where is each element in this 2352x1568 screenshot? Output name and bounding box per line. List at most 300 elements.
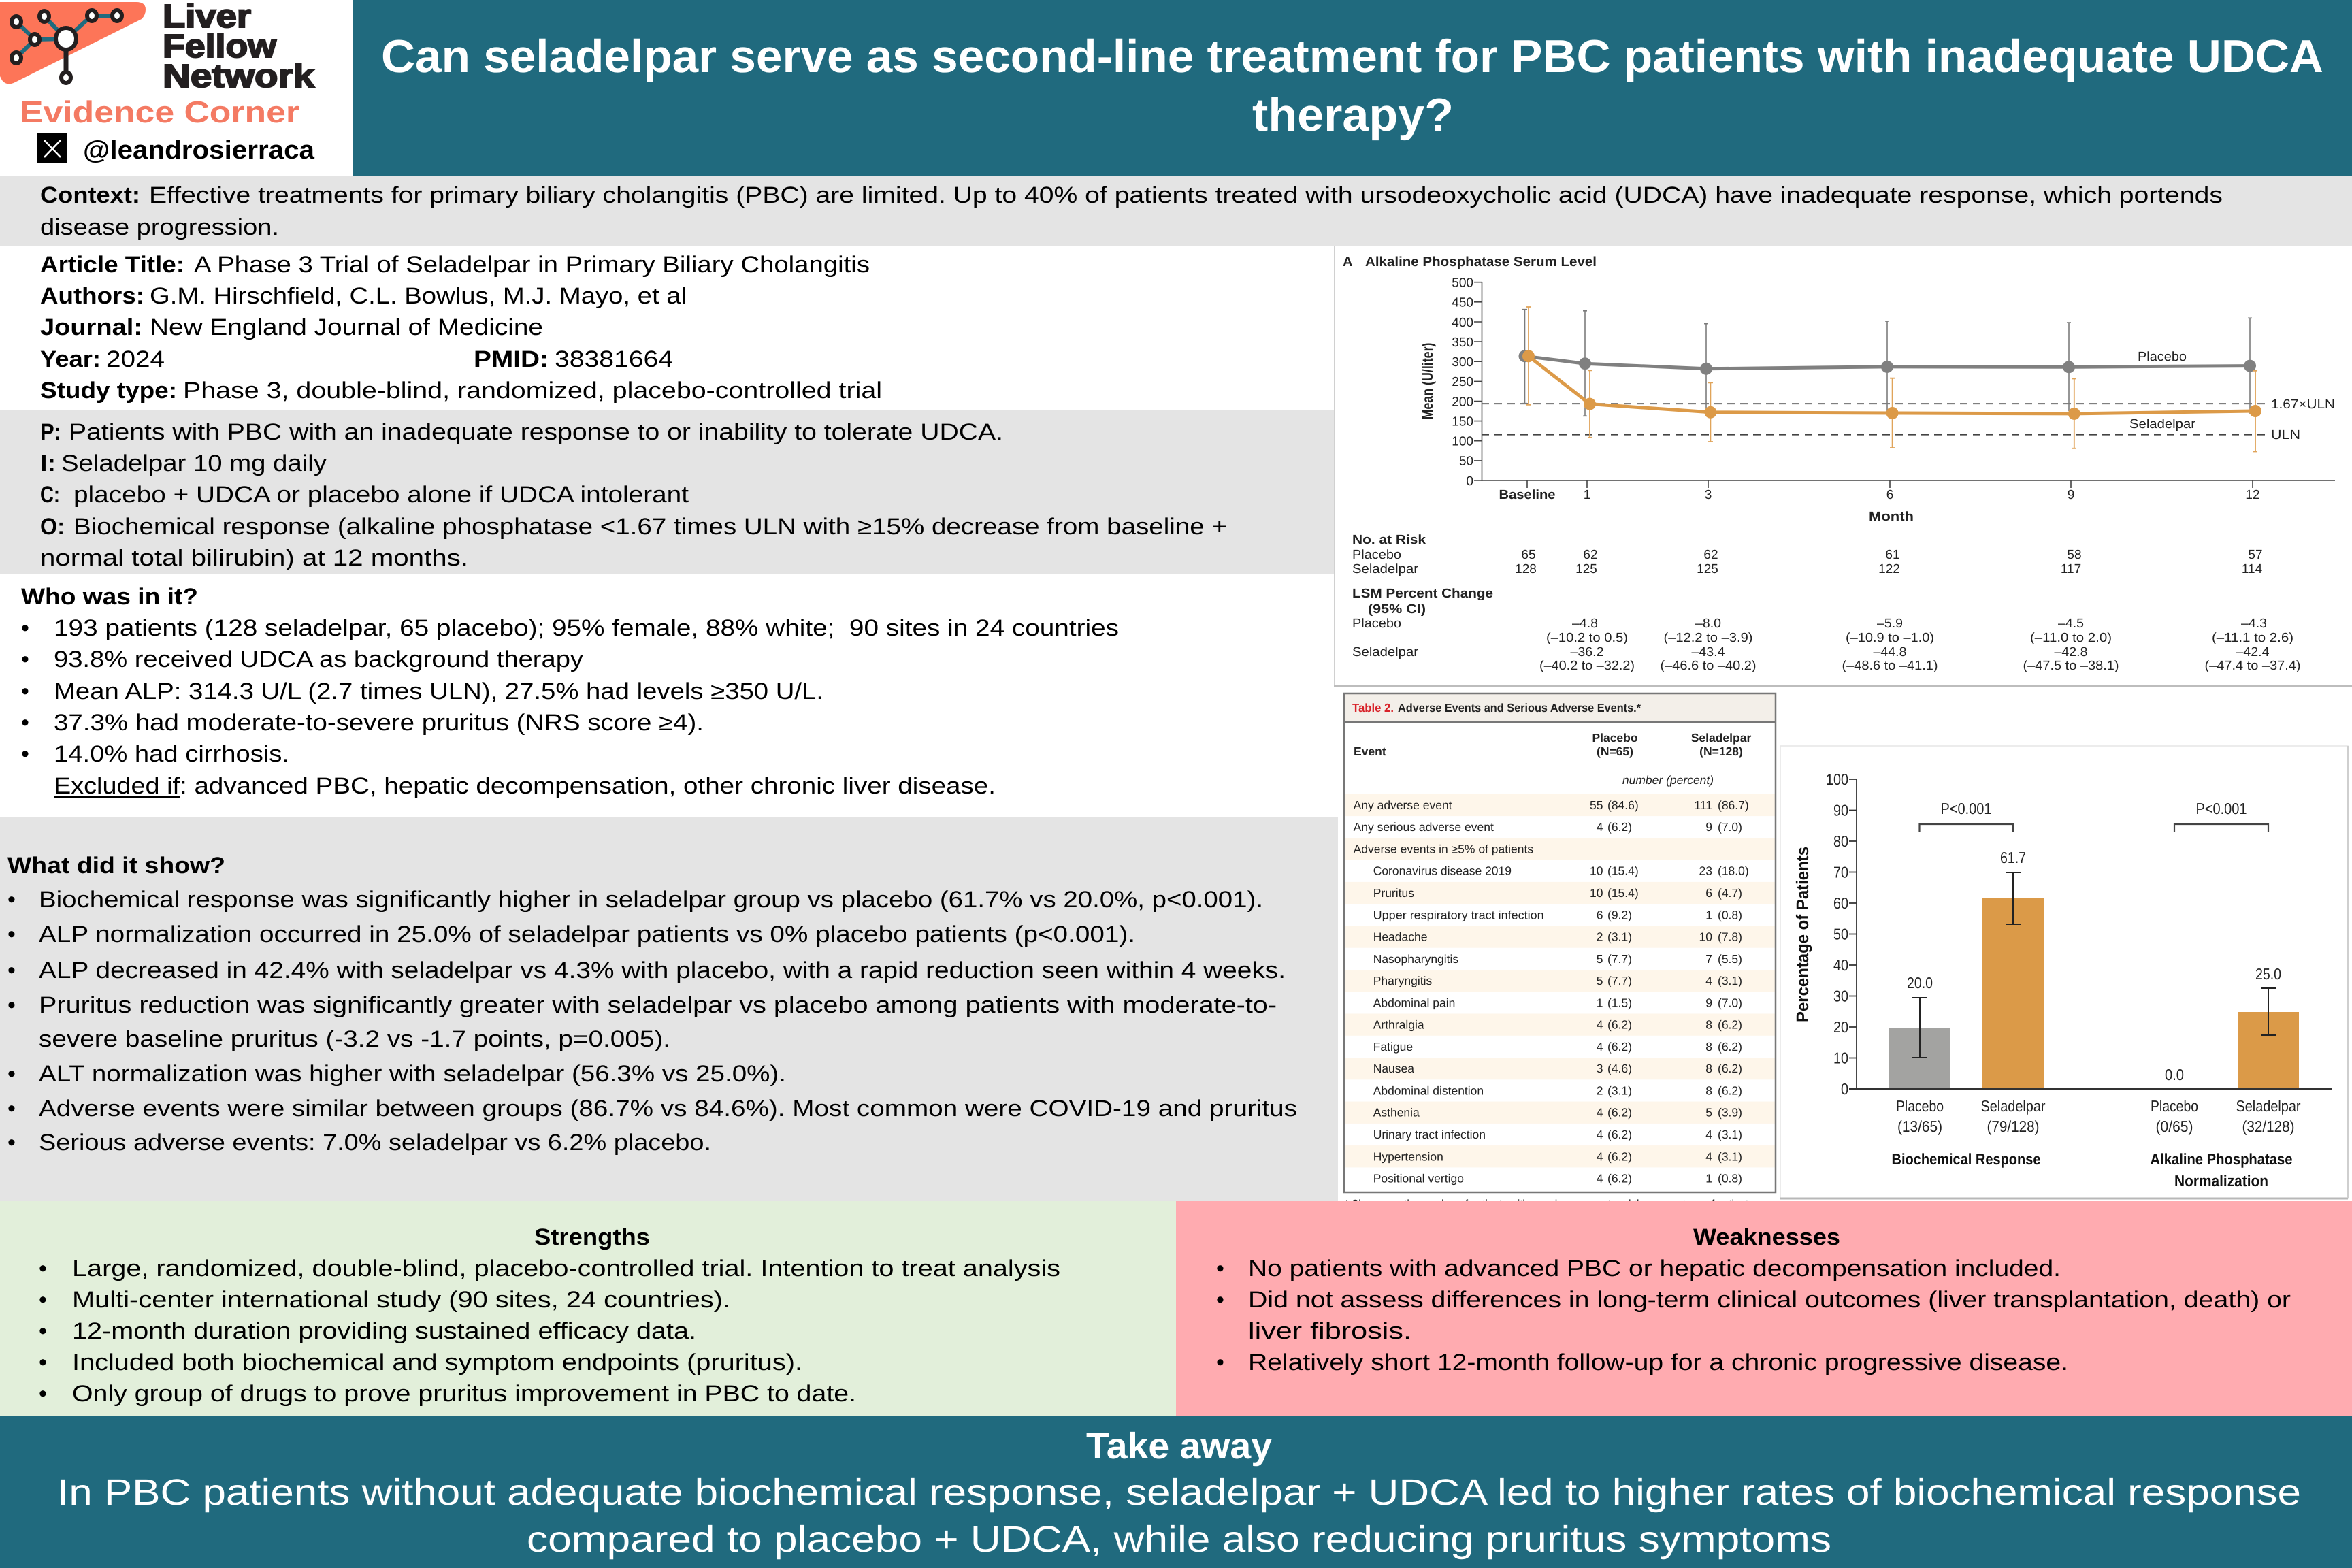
- panel: context: disease progression.: [40, 214, 279, 240]
- panel: article details: Article Title:: [40, 252, 184, 278]
- panel: what did it show: •: [7, 1061, 16, 1087]
- table rows: Any adverse event: [1354, 798, 1452, 812]
- table: LSM percent change: –42.4: [2236, 645, 2270, 659]
- series: seladelpar: [1522, 307, 2261, 452]
- panel: what did it show: •: [7, 1096, 16, 1122]
- x axis: 6: [1886, 488, 1893, 502]
- y axis: 80: [1833, 832, 1848, 850]
- table rows: (6.2): [1718, 1018, 1742, 1032]
- panel: strengths: 12-month duration providing sustained efficacy data.: [72, 1318, 696, 1344]
- table rows: (15.4): [1607, 864, 1639, 878]
- table rows: 3: [1597, 1062, 1603, 1075]
- table rows: (6.2): [1718, 1062, 1742, 1075]
- group labels: Seladelpar: [1980, 1097, 2046, 1115]
- panel: article details: Journal:: [40, 314, 142, 340]
- panel: strengths: Multi-center international study (90 sites, 24 countries).: [72, 1287, 730, 1313]
- panel: what did it show: ALP normalization occurred in 25.0% of seladelpar patients vs 0% placebo patients (p<0.001).: [39, 921, 1135, 947]
- y axis: 200: [1452, 395, 1473, 409]
- y axis: 50: [1833, 926, 1848, 943]
- handle: @leandrosierraca: [83, 136, 315, 165]
- table footnote clipped: * Shown are the number of patients with an adverse event and the percentage of patients.: [1345, 1197, 1757, 1211]
- table rows: [1354, 798, 1749, 1186]
- panel: what did it show: Pruritus reduction was significantly greater with seladelpar vs placebo among patients with moderate-to-: [39, 992, 1277, 1018]
- panel: weaknesses: Relatively short 12-month follow-up for a chronic progressive disease.: [1248, 1350, 2068, 1375]
- group labels: (32/128): [2242, 1117, 2295, 1135]
- table header: Event: [1354, 745, 1386, 758]
- group labels: Placebo: [1896, 1097, 1944, 1115]
- value labels: 0.0: [2165, 1066, 2184, 1083]
- table rows: (3.1): [1718, 974, 1742, 987]
- group labels: (13/65): [1897, 1117, 1942, 1135]
- panel: who was in it: •: [21, 710, 29, 736]
- x axis: 3: [1705, 488, 1712, 502]
- table title: Table 2.: [1352, 701, 1394, 715]
- panel: take away: [0, 1416, 2352, 1568]
- table rows: 7: [1705, 952, 1712, 966]
- panel: strengths: •: [39, 1287, 47, 1313]
- table rows: (6.2): [1607, 1172, 1632, 1186]
- y axis: 40: [1833, 956, 1848, 974]
- y axis: 60: [1833, 894, 1848, 912]
- table rows: (3.1): [1718, 1149, 1742, 1163]
- logo wordmark: Network: [163, 59, 314, 95]
- table rows: (7.7): [1607, 952, 1632, 966]
- table rows: (1.5): [1607, 996, 1632, 1009]
- panel: who was in it: •: [21, 741, 29, 767]
- group labels: Placebo: [2151, 1097, 2198, 1115]
- table rows: 5: [1705, 1106, 1712, 1120]
- chart: alkaline phosphatase serum level: [1334, 246, 2352, 686]
- table rows: 9: [1705, 820, 1712, 834]
- panel: strengths: Strengths: [534, 1224, 650, 1250]
- panel: weaknesses: Weaknesses: [1693, 1224, 1840, 1250]
- panel: strengths: Included both biochemical and symptom endpoints (pruritus).: [72, 1350, 802, 1375]
- panel: PICO: Biochemical response (alkaline phosphatase <1.67 times ULN with ≥15% decrease from baseline +: [74, 514, 1227, 540]
- table rows: 4: [1597, 1040, 1603, 1054]
- panel: strengths: [0, 1201, 1176, 1416]
- table rows: (9.2): [1607, 908, 1632, 921]
- table rows: Coronavirus disease 2019: [1373, 864, 1512, 878]
- chart title: Alkaline Phosphatase Serum Level: [1365, 255, 1597, 270]
- table rows: Arthralgia: [1373, 1018, 1424, 1032]
- y axis: 150: [1452, 414, 1473, 429]
- y axis: 500: [1452, 276, 1473, 290]
- table rows: 10: [1699, 930, 1712, 944]
- panel: article details: New England Journal of Medicine: [150, 314, 543, 340]
- table: number at risk: 114: [2242, 562, 2263, 576]
- panel: article details: Year:: [40, 346, 101, 372]
- table: number at risk: No. at Risk: [1352, 533, 1426, 547]
- table rows: 4: [1705, 1149, 1712, 1163]
- table rows: Asthenia: [1373, 1106, 1420, 1120]
- table rows: Upper respiratory tract infection: [1373, 908, 1544, 921]
- group labels: Normalization: [2174, 1172, 2268, 1190]
- table: LSM percent change: –4.3: [2241, 617, 2267, 631]
- table rows: 6: [1705, 886, 1712, 900]
- panel: PICO: normal total bilirubin) at 12 months.: [40, 545, 468, 571]
- significance brackets: P<0.001: [2195, 800, 2247, 817]
- table: LSM percent change: (–47.5 to –38.1): [2023, 659, 2119, 673]
- y axis: 70: [1833, 863, 1848, 881]
- logo wordmark: [163, 0, 314, 95]
- panel: take away: Take away: [1086, 1426, 1272, 1467]
- table rows: 4: [1597, 820, 1603, 834]
- panel: what did it show: What did it show?: [7, 853, 225, 879]
- table rows: (0.8): [1718, 1172, 1742, 1186]
- table rows: 8: [1705, 1040, 1712, 1054]
- table rows: 4: [1597, 1018, 1603, 1032]
- table: LSM percent change: –5.9: [1877, 617, 1903, 631]
- logo subtitle: Evidence Corner: [20, 95, 299, 129]
- table rows: 8: [1705, 1062, 1712, 1075]
- table: LSM percent change: Seladelpar: [1352, 645, 1419, 659]
- table: LSM percent change: LSM Percent Change: [1352, 587, 1493, 601]
- panel: strengths: •: [39, 1318, 47, 1344]
- y axis: Mean (U/liter): [1419, 343, 1436, 419]
- y axis: 400: [1452, 316, 1473, 330]
- table: LSM percent change: (–10.2 to 0.5): [1546, 631, 1628, 645]
- y axis: 350: [1452, 336, 1473, 350]
- table rows: (6.2): [1607, 1106, 1632, 1120]
- panel: article details: 38381664: [555, 346, 673, 372]
- y axis: 90: [1833, 802, 1848, 819]
- table: LSM percent change: (–40.2 to –32.2): [1539, 659, 1635, 673]
- table rows: 23: [1699, 864, 1712, 878]
- table rows: 4: [1597, 1149, 1603, 1163]
- panel: what did it show: severe baseline pruritus (-3.2 vs -1.7 points, p=0.005).: [39, 1026, 670, 1052]
- table rows: 1: [1597, 996, 1603, 1009]
- table: number at risk: 62: [1703, 548, 1718, 562]
- table: number at risk: 58: [2067, 548, 2082, 562]
- panel: PICO: placebo + UDCA or placebo alone if UDCA intolerant: [74, 482, 689, 508]
- panel: context: Effective treatments for primary biliary cholangitis (PBC) are limited. Up to 40% of patients treated with ursodeoxycholic acid (UDCA) have inadequate response, which portends: [149, 182, 2223, 208]
- table rows: (7.7): [1607, 974, 1632, 987]
- value labels: 20.0: [1907, 974, 1933, 992]
- table rows: (15.4): [1607, 886, 1639, 900]
- group labels: Alkaline Phosphatase: [2151, 1150, 2292, 1168]
- table: LSM percent change: (–12.2 to –3.9): [1663, 631, 1753, 645]
- x axis: Baseline: [1499, 488, 1556, 502]
- table rows: (6.2): [1607, 820, 1632, 834]
- panel: who was in it: 193 patients (128 seladelpar, 65 placebo); 95% female, 88% white; 90 sites in 24 countries: [54, 615, 1119, 641]
- table header: (N=128): [1699, 745, 1743, 758]
- panel: weaknesses: liver fibrosis.: [1248, 1318, 1411, 1344]
- table rows: 6: [1597, 908, 1603, 921]
- y axis: Percentage of Patients: [1793, 847, 1812, 1022]
- table: LSM percent change: (–47.4 to –37.4): [2205, 659, 2300, 673]
- series: placebo: Placebo: [2138, 350, 2187, 364]
- table rows: 2: [1597, 1083, 1603, 1097]
- table rows: (6.2): [1607, 1149, 1632, 1163]
- table: number at risk: 125: [1697, 562, 1718, 576]
- panel: what did it show: •: [7, 958, 16, 983]
- table rows: Abdominal pain: [1373, 996, 1455, 1009]
- panel: take away: In PBC patients without adequate biochemical response, seladelpar + UDCA led to higher rates of biochemical response: [57, 1472, 2301, 1513]
- panel: who was in it: Excluded if: [54, 773, 180, 799]
- table: LSM percent change: –4.5: [2058, 617, 2084, 631]
- table: LSM percent change: –43.4: [1692, 645, 1725, 659]
- table: number at risk: 117: [2061, 562, 2081, 576]
- table rows: (3.1): [1607, 930, 1632, 944]
- table: LSM percent change: (95% CI): [1368, 602, 1426, 617]
- title banner: [353, 0, 2352, 176]
- x axis: 12: [2245, 488, 2260, 502]
- table rows: Nasopharyngitis: [1373, 952, 1458, 966]
- panel: PICO: I:: [40, 451, 56, 476]
- series: seladelpar: Seladelpar: [2129, 417, 2196, 431]
- y axis: 450: [1452, 296, 1473, 310]
- y axis: 10: [1833, 1049, 1848, 1067]
- x axis: 9: [2068, 488, 2074, 502]
- table: number at risk: [1352, 533, 2263, 576]
- panel: article details: [40, 252, 882, 404]
- bars: [1849, 898, 2332, 1089]
- table rows: 1: [1705, 908, 1712, 921]
- table rows: 4: [1597, 1172, 1603, 1186]
- table rows: (6.2): [1607, 1128, 1632, 1141]
- table: number at risk: 122: [1878, 562, 1900, 576]
- panel: article details: Phase 3, double-blind, randomized, placebo-controlled trial: [183, 378, 882, 404]
- table rows: Any serious adverse event: [1354, 820, 1494, 834]
- table rows: (6.2): [1718, 1083, 1742, 1097]
- table rows: 9: [1705, 996, 1712, 1009]
- table rows: (3.9): [1718, 1106, 1742, 1120]
- panel: take away: compared to placebo + UDCA, while also reducing pruritus symptoms: [527, 1519, 1831, 1560]
- panel: who was in it: •: [21, 615, 29, 641]
- table header: Seladelpar: [1691, 731, 1751, 745]
- table rows: (6.2): [1718, 1040, 1742, 1054]
- table rows: 8: [1705, 1018, 1712, 1032]
- table rows: 1: [1705, 1172, 1712, 1186]
- chart: biochemical response and ALP normalization bars: [1780, 746, 2348, 1198]
- panel: PICO: O:: [40, 514, 65, 540]
- panel: PICO: [0, 410, 1335, 574]
- panel: context: [0, 176, 2352, 246]
- table: number at risk: 128: [1515, 562, 1537, 576]
- table rows: Urinary tract infection: [1373, 1128, 1486, 1141]
- panel: who was in it: 37.3% had moderate-to-severe pruritus (NRS score ≥4).: [54, 710, 704, 736]
- table: LSM percent change: –42.8: [2054, 645, 2088, 659]
- table rows: 5: [1597, 952, 1603, 966]
- icon: liver network: [0, 2, 146, 84]
- group labels: Biochemical Response: [1892, 1150, 2040, 1168]
- table rows: (86.7): [1718, 798, 1749, 812]
- panel: article details: A Phase 3 Trial of Seladelpar in Primary Biliary Cholangitis: [194, 252, 870, 278]
- table: number at risk: 62: [1583, 548, 1598, 562]
- panel: who was in it: Who was in it?: [21, 584, 198, 610]
- table rows: Abdominal distention: [1373, 1083, 1484, 1097]
- logo wordmark: Fellow: [163, 29, 277, 65]
- logo: Liver Fellow Network Evidence Corner: [0, 0, 315, 165]
- panel: strengths: Only group of drugs to prove pruritus improvement in PBC to date.: [72, 1381, 856, 1407]
- table: LSM percent change: –44.8: [1873, 645, 1907, 659]
- table rows: (0.8): [1718, 908, 1742, 921]
- table: number at risk: Placebo: [1352, 548, 1401, 562]
- panel: what did it show: Biochemical response was significantly higher in seladelpar group vs placebo (61.7% vs 20.0%, p<0.001).: [39, 887, 1263, 913]
- table rows: (7.8): [1718, 930, 1742, 944]
- table: number at risk: 61: [1885, 548, 1900, 562]
- y axis: [1419, 276, 1482, 489]
- table rows: 8: [1705, 1083, 1712, 1097]
- significance brackets: P<0.001: [1941, 800, 1991, 817]
- panel: what did it show: Serious adverse events: 7.0% seladelpar vs 6.2% placebo.: [39, 1130, 711, 1156]
- table rows: (5.5): [1718, 952, 1742, 966]
- table rows: Positional vertigo: [1373, 1172, 1464, 1186]
- table rows: (84.6): [1607, 798, 1639, 812]
- table: number at risk: Seladelpar: [1352, 562, 1419, 576]
- panel: PICO: Patients with PBC with an inadequate response to or inability to tolerate UDCA.: [69, 419, 1003, 445]
- table rows: 10: [1590, 886, 1603, 900]
- table: LSM percent change: –8.0: [1695, 617, 1721, 631]
- table title: Adverse Events and Serious Adverse Events.*: [1398, 701, 1641, 715]
- panel: what did it show: •: [7, 992, 16, 1018]
- significance brackets: [1919, 800, 2268, 832]
- title banner: therapy?: [1252, 89, 1454, 141]
- table rows: (18.0): [1718, 864, 1749, 878]
- table rows: Pruritus: [1373, 886, 1414, 900]
- panel: context: Context:: [40, 182, 140, 208]
- table: number at risk: 57: [2248, 548, 2263, 562]
- panel: who was in it: •: [21, 679, 29, 704]
- panel: PICO: C:: [40, 482, 60, 508]
- icon: X: [37, 133, 67, 163]
- panel: weaknesses: No patients with advanced PBC or hepatic decompensation included.: [1248, 1256, 2061, 1281]
- x axis: 1: [1584, 488, 1590, 502]
- table: LSM percent change: (–11.0 to 2.0): [2030, 631, 2112, 645]
- panel: what did it show: •: [7, 921, 16, 947]
- table: number at risk: 125: [1575, 562, 1597, 576]
- value labels: 25.0: [2255, 965, 2281, 983]
- panel: weaknesses: [1176, 1201, 2352, 1416]
- panel: what did it show: •: [7, 887, 16, 913]
- panel: weaknesses: •: [1216, 1350, 1224, 1375]
- series: placebo: [1519, 310, 2256, 416]
- table: LSM percent change: –4.8: [1572, 617, 1598, 631]
- table: LSM percent change: (–46.6 to –40.2): [1661, 659, 1756, 673]
- y axis: 0: [1841, 1080, 1848, 1098]
- table rows: (7.0): [1718, 820, 1742, 834]
- table rows: (7.0): [1718, 996, 1742, 1009]
- y axis: 50: [1459, 455, 1473, 469]
- title banner: Can seladelpar serve as second-line treatment for PBC patients with inadequate UDCA: [381, 31, 2323, 82]
- table rows: 4: [1705, 1128, 1712, 1141]
- panel: what did it show: ALT normalization was higher with seladelpar (56.3% vs 25.0%).: [39, 1061, 786, 1087]
- table header: number (percent): [1622, 773, 1714, 787]
- panel: article details: PMID:: [474, 346, 549, 372]
- panel: who was in it: [21, 584, 1119, 799]
- table rows: 111: [1694, 798, 1712, 812]
- reference lines: ULN: [2271, 428, 2300, 442]
- table rows: 4: [1597, 1128, 1603, 1141]
- y axis: 100: [1826, 770, 1848, 788]
- x axis: [1482, 480, 2335, 524]
- table: number at risk: 65: [1521, 548, 1536, 562]
- group labels: Seladelpar: [2236, 1097, 2301, 1115]
- panel: who was in it: Mean ALP: 314.3 U/L (2.7 times ULN), 27.5% had levels ≥350 U/L.: [54, 679, 823, 704]
- table rows: (3.1): [1718, 1128, 1742, 1141]
- table rows: 10: [1590, 864, 1603, 878]
- table rows: Hypertension: [1373, 1149, 1443, 1163]
- y axis: 250: [1452, 375, 1473, 389]
- group labels: (0/65): [2156, 1117, 2193, 1135]
- table rows: Adverse events in ≥5% of patients: [1354, 842, 1533, 855]
- table: LSM percent change: Placebo: [1352, 617, 1401, 631]
- y axis: 300: [1452, 355, 1473, 370]
- table rows: 4: [1597, 1106, 1603, 1120]
- table header: Placebo: [1592, 731, 1638, 745]
- table rows: 5: [1597, 974, 1603, 987]
- panel: weaknesses: •: [1216, 1287, 1224, 1313]
- panel: strengths: •: [39, 1381, 47, 1407]
- reference lines: [1482, 397, 2335, 442]
- table rows: (3.1): [1607, 1083, 1632, 1097]
- table: LSM percent change: (–11.1 to 2.6): [2212, 631, 2293, 645]
- chart title: A: [1343, 255, 1352, 270]
- panel: what did it show: ALP decreased in 42.4% with seladelpar vs 4.3% with placebo, with a rapid reduction seen within 4 weeks.: [39, 958, 1286, 983]
- panel: what did it show: [0, 817, 1338, 1201]
- table rows: Pharyngitis: [1373, 974, 1433, 987]
- panel: PICO: P:: [40, 419, 61, 445]
- panel: who was in it: 93.8% received UDCA as background therapy: [54, 647, 583, 672]
- panel: weaknesses: Did not assess differences in long-term clinical outcomes (liver transplantation, death) or: [1248, 1287, 2291, 1313]
- table: adverse events: [1344, 693, 1776, 1192]
- table: LSM percent change: (–48.6 to –41.1): [1842, 659, 1938, 673]
- panel: article details: G.M. Hirschfield, C.L. Bowlus, M.J. Mayo, et al: [150, 283, 687, 309]
- table rows: Headache: [1373, 930, 1427, 944]
- table rows: 4: [1705, 974, 1712, 987]
- table: LSM percent change: (–10.9 to –1.0): [1846, 631, 1934, 645]
- panel: strengths: Large, randomized, double-blind, placebo-controlled trial. Intention to treat analysis: [72, 1256, 1060, 1281]
- table rows: 2: [1597, 930, 1603, 944]
- group labels: (79/128): [1987, 1117, 2039, 1135]
- table header: [1354, 731, 1751, 787]
- table: LSM percent change: –36.2: [1571, 645, 1603, 659]
- reference lines: 1.67×ULN: [2271, 397, 2335, 412]
- table rows: (4.6): [1607, 1062, 1632, 1075]
- panel: article details: Authors:: [40, 283, 144, 309]
- y axis: 30: [1833, 987, 1848, 1004]
- table rows: (6.2): [1607, 1040, 1632, 1054]
- panel: what did it show: Adverse events were similar between groups (86.7% vs 84.6%). Most common were COVID-19 and pruritus: [39, 1096, 1297, 1122]
- y axis: 0: [1466, 474, 1473, 489]
- panel: article details: 2024: [106, 346, 165, 372]
- panel: who was in it: •: [21, 647, 29, 672]
- y axis: 100: [1452, 434, 1473, 449]
- panel: weaknesses: •: [1216, 1256, 1224, 1281]
- panel: who was in it: 14.0% had cirrhosis.: [54, 741, 289, 767]
- panel: what did it show: •: [7, 1130, 16, 1156]
- panel: strengths: •: [39, 1256, 47, 1281]
- table rows: (4.7): [1718, 886, 1742, 900]
- panel: PICO: Seladelpar 10 mg daily: [61, 451, 327, 476]
- error bars: [1912, 872, 2276, 1058]
- panel: who was in it: : advanced PBC, hepatic decompensation, other chronic liver disease.: [180, 773, 996, 799]
- panel: article details: Study type:: [40, 378, 177, 404]
- table: LSM percent change: [1352, 587, 2300, 673]
- y axis: [1793, 770, 1857, 1098]
- table header: (N=65): [1597, 745, 1633, 758]
- value labels: [1907, 849, 2281, 1083]
- table rows: (6.2): [1607, 1018, 1632, 1032]
- table rows: 55: [1590, 798, 1603, 812]
- table rows: Nausea: [1373, 1062, 1414, 1075]
- x axis: Month: [1869, 510, 1914, 524]
- y axis: 20: [1833, 1018, 1848, 1036]
- group labels: [1892, 1097, 2301, 1190]
- panel: strengths: •: [39, 1350, 47, 1375]
- value labels: 61.7: [2000, 849, 2026, 866]
- table rows: Fatigue: [1373, 1040, 1413, 1054]
